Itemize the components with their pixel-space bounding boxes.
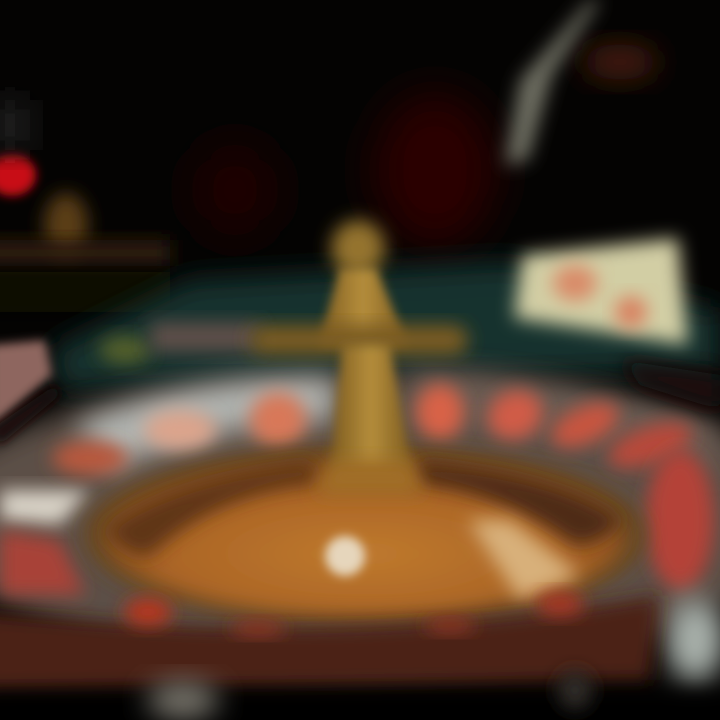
gold spindle bbox=[250, 220, 468, 495]
wheel base bbox=[0, 592, 720, 720]
wheel bowl bbox=[105, 460, 623, 616]
playing card bbox=[514, 238, 688, 345]
left edge object bbox=[0, 340, 60, 445]
wheel outer ring bbox=[0, 372, 720, 682]
wheel rim bbox=[83, 445, 647, 625]
right dark wedge bbox=[620, 360, 720, 410]
teal table surface bbox=[50, 262, 720, 390]
left background: red light and gold object bbox=[0, 100, 170, 312]
